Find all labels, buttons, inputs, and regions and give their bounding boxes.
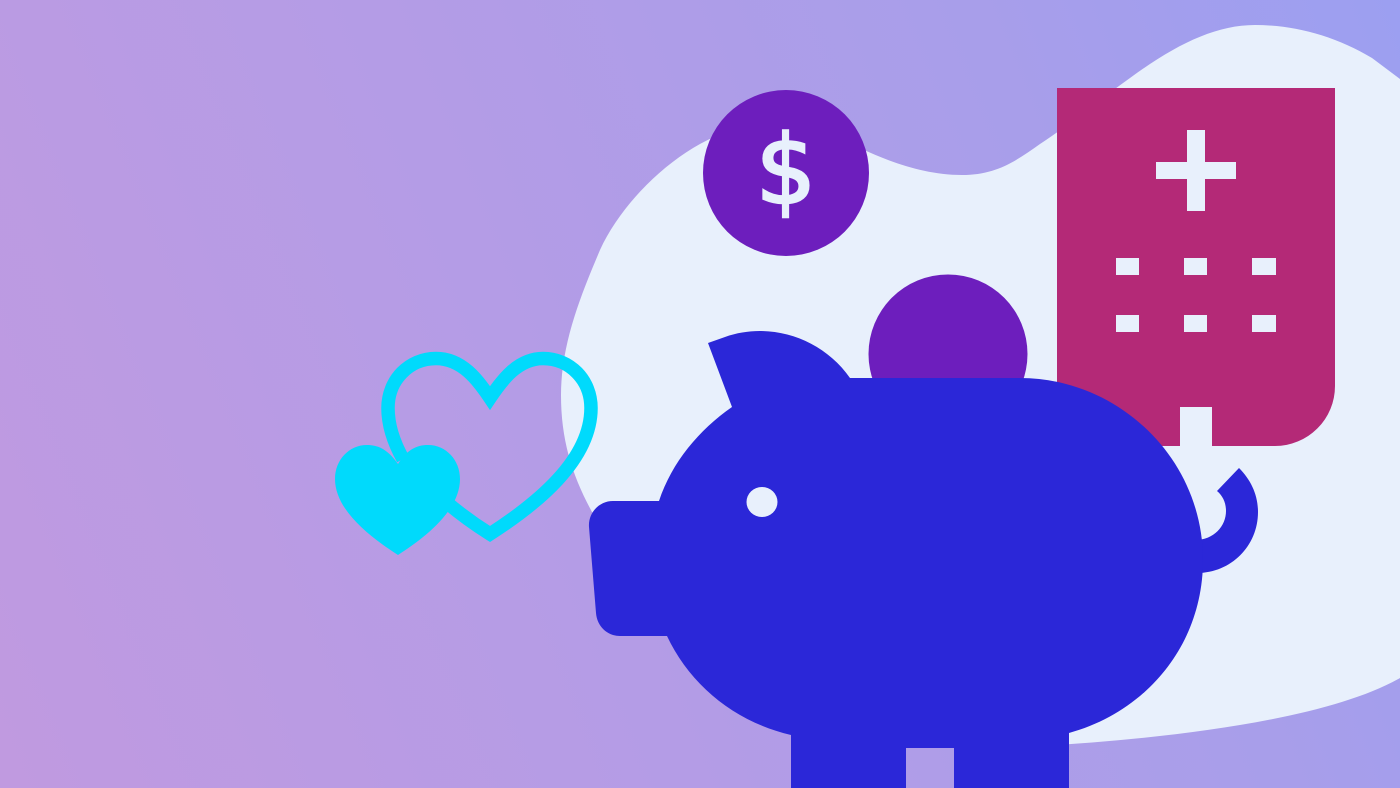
hospital windows bbox=[1116, 258, 1276, 332]
pig body bbox=[589, 331, 1203, 788]
pig tail bbox=[1195, 468, 1258, 573]
dollar sign: $ bbox=[756, 116, 816, 226]
icon: medical cross bbox=[1156, 130, 1236, 211]
background blob bbox=[561, 25, 1400, 746]
coin entering piggy bank bbox=[868, 274, 1028, 434]
icon: dollar coin bbox=[703, 90, 869, 256]
icon: hospital building bbox=[1057, 88, 1335, 446]
icon: outlined heart bbox=[388, 358, 591, 534]
icon: piggy bank bbox=[589, 331, 1258, 788]
pig eye bbox=[746, 487, 778, 517]
icon: filled heart bbox=[335, 445, 460, 555]
